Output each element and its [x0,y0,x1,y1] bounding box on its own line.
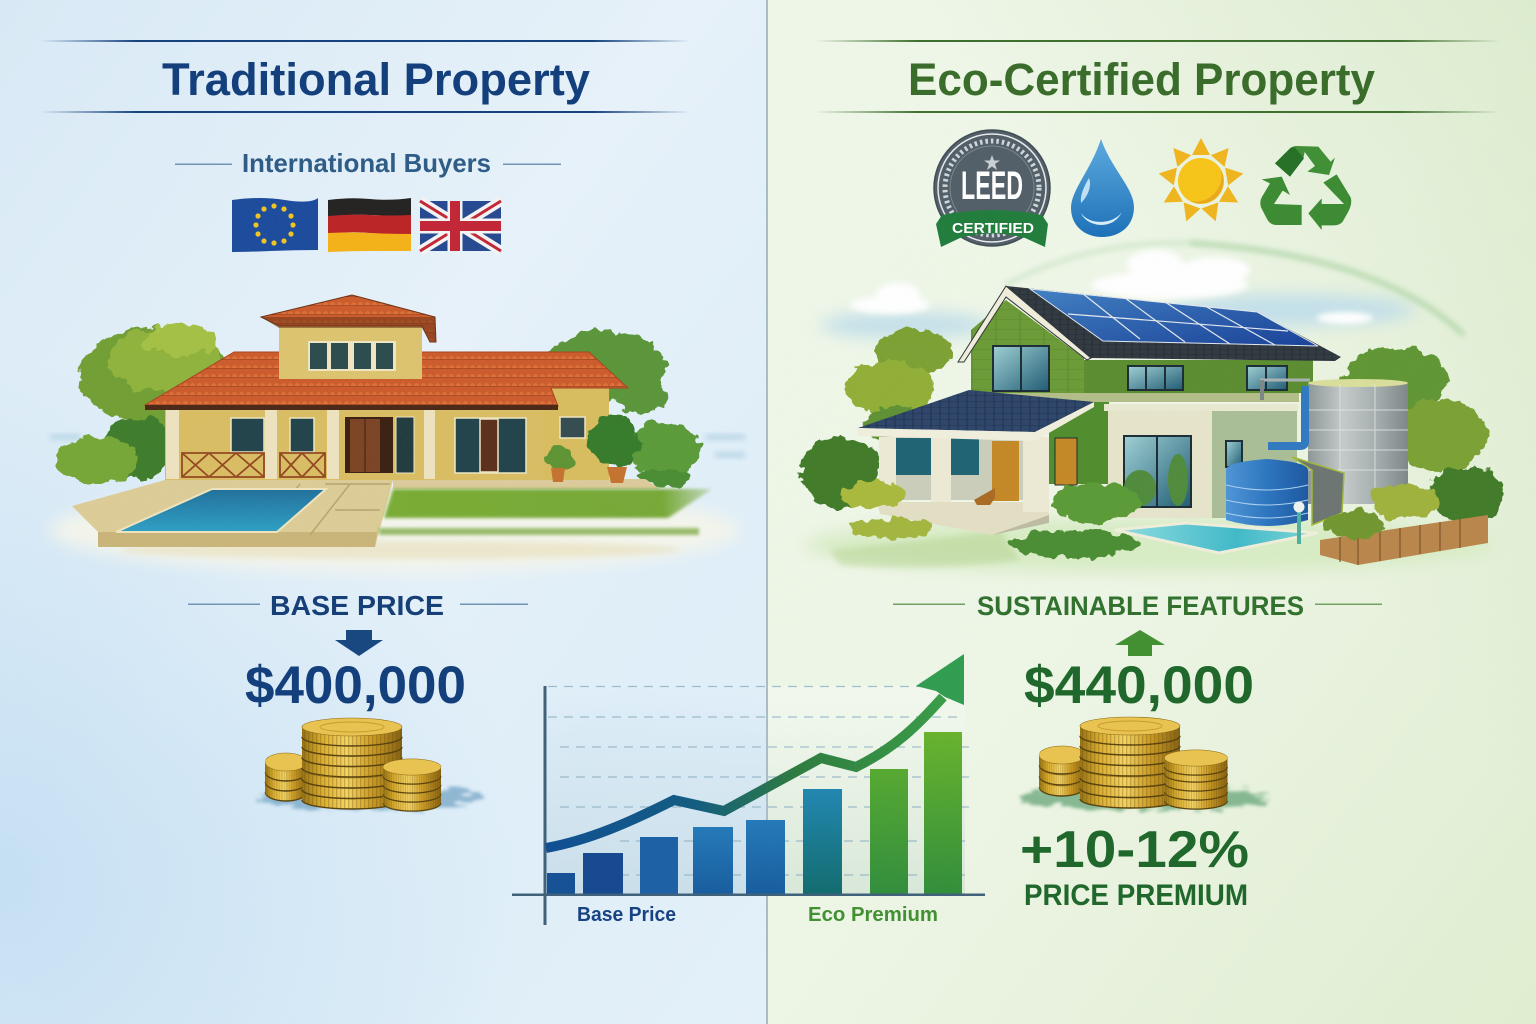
tower windows [308,341,396,371]
shrubs [840,481,1439,558]
callout: price premium: PRICE PREMIUM [1024,879,1248,912]
paving [72,479,660,547]
flags [232,198,501,252]
panel: eco-certified property [800,40,1503,912]
potted plants [544,415,642,483]
callout: price premium: +10-12% [1020,821,1249,879]
illustration: eco house [800,243,1503,573]
blue tank [1226,459,1308,526]
arrow: up [1115,630,1165,656]
illustration: traditional villa [50,295,745,572]
windows [231,417,585,473]
pond [1115,523,1318,553]
label: base price: Base Price [577,904,676,926]
house walls [165,323,609,480]
callout: price premium [1020,821,1249,912]
arrow: down [335,630,383,656]
background: eco side [768,0,1536,1024]
lawn [379,489,712,535]
porch roof [857,390,1094,441]
flag: UK [420,201,501,251]
porch [877,437,1077,535]
main roof [958,286,1341,362]
icon: LEED badge: LEED [961,164,1023,208]
clouds [850,250,1373,324]
center divider [766,0,768,1024]
columns [166,410,435,479]
label: eco premium: Eco Premium [808,904,938,926]
windows [993,346,1287,507]
icon: sun [1157,138,1245,224]
solar panels [1030,289,1318,346]
icon: coin stacks [1020,717,1270,810]
trees [56,324,700,487]
chart: price growth [512,654,985,926]
pool [116,489,326,532]
subheading: international buyers: International Buyers [242,148,491,178]
flag: EU [232,198,318,252]
bars [547,732,962,894]
price: 400000: $400,000 [245,656,466,715]
chart backdrop [546,686,965,894]
silver tank [1308,379,1408,504]
label: sustainable features: SUSTAINABLE FEATURES [977,591,1304,621]
house walls [969,300,1313,518]
window reflection [1124,454,1188,506]
ground wash [50,437,745,572]
icon: recycle [1260,146,1351,230]
icon: LEED badge [934,130,1050,247]
arc [1005,243,1464,335]
trees [800,328,1503,523]
icon: coin stacks [255,718,485,811]
blue pipe [1260,380,1310,446]
railings [182,453,325,477]
background: traditional side [0,0,768,1024]
panel: traditional property [40,40,745,811]
side panel [1292,457,1344,525]
door [345,417,414,473]
icon: LEED badge: CERTIFIED [952,220,1034,237]
axes [512,686,985,925]
scene wash [805,294,1495,573]
tower wall [279,326,422,379]
icon: water drop [1071,139,1134,237]
price: 440000: $440,000 [1024,656,1254,715]
label: base price: BASE PRICE [270,590,444,621]
eaves [145,295,558,410]
heading: traditional property: Traditional Property [162,54,590,105]
fence [1320,515,1488,565]
trend arrow [546,654,964,848]
main roof [145,352,628,406]
flag: Germany [328,198,411,252]
heading: eco-certified property: Eco-Certified Property [908,54,1375,105]
lamp post [1294,502,1304,544]
